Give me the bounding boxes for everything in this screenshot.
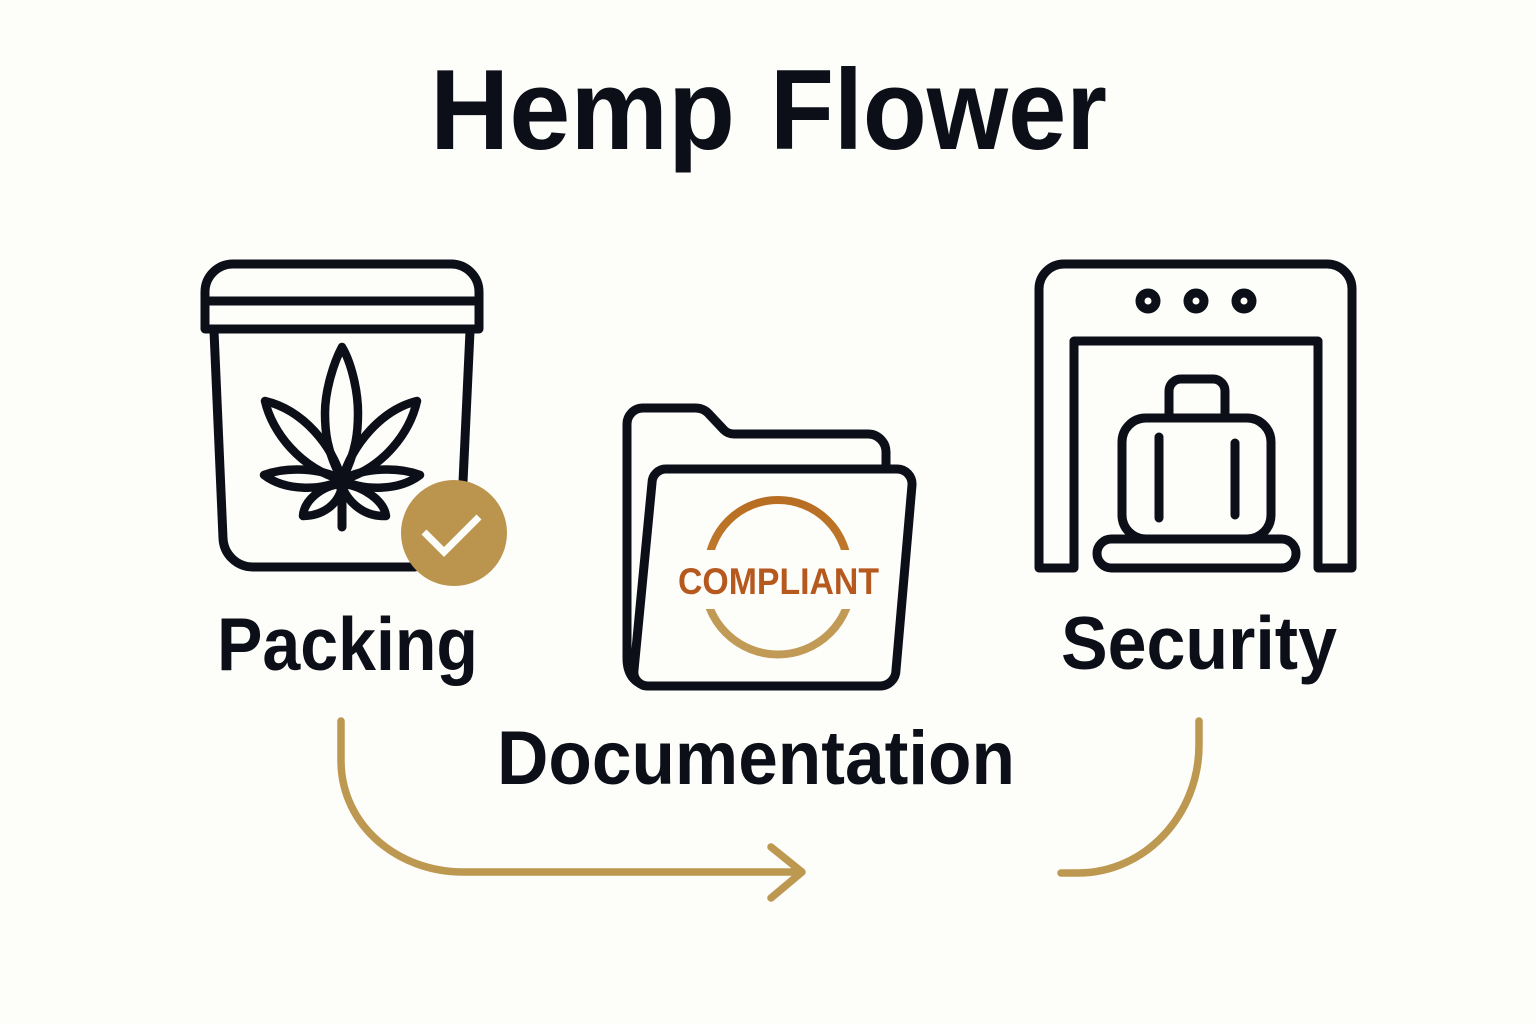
icon: check badge	[401, 480, 507, 586]
jar body	[214, 331, 470, 567]
scanner frame	[1039, 264, 1352, 568]
jar lid	[205, 264, 479, 329]
title: Flower	[770, 47, 1107, 174]
title: Hemp	[430, 47, 735, 174]
arrow: packing to documentation	[341, 721, 802, 898]
label: documentation: Documentation	[497, 716, 1015, 801]
compliant seal	[678, 500, 879, 654]
label: security: Security	[1061, 601, 1337, 685]
hemp leaf	[264, 347, 420, 527]
scanner lights	[1140, 293, 1252, 309]
conveyor belt	[1097, 539, 1296, 568]
arrow: curve to security	[1061, 721, 1199, 873]
icon: packing jar	[205, 264, 479, 567]
title	[430, 47, 1107, 174]
luggage	[1122, 379, 1271, 539]
folder back	[627, 408, 886, 686]
icon: compliance folder	[627, 408, 912, 686]
label: packing: Packing	[217, 602, 478, 686]
icon: security scanner	[1039, 264, 1352, 568]
folder front	[634, 469, 912, 686]
compliant seal: COMPLIANT	[678, 561, 879, 602]
